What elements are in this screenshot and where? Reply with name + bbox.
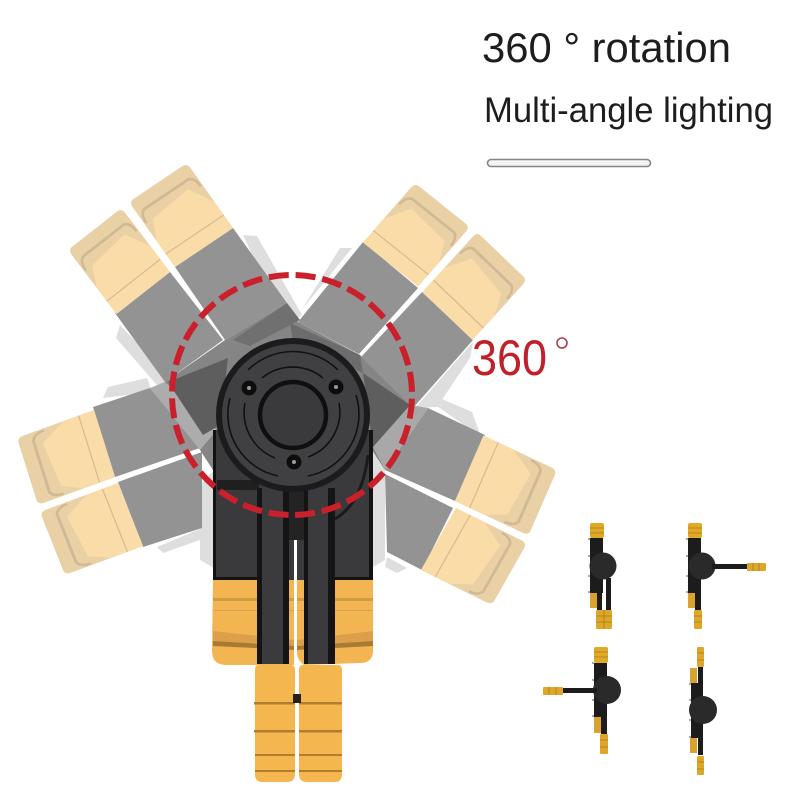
ghost wing tan tip: upper right outer <box>422 232 527 340</box>
ghost wing tan tip: upper right inner <box>363 183 470 286</box>
rotating hub <box>216 338 370 492</box>
red dashed rotation circle <box>172 275 412 515</box>
subtitle: Multi-angle lighting <box>484 91 773 130</box>
hub screws <box>242 380 344 470</box>
title: 360 ° rotation <box>482 24 731 71</box>
small icon: one arm right <box>686 523 766 629</box>
ghost wings: grey panels <box>93 228 485 570</box>
ghost wing tan tip: lower right lower <box>421 508 527 605</box>
small icon: one arm left <box>543 647 621 754</box>
main lamp: right leg <box>304 488 335 664</box>
ghost wing tan tip: lower left lower <box>40 483 143 575</box>
hub groove arcs <box>228 352 359 476</box>
ghost wing tan tip: upper left outer <box>68 208 170 314</box>
ghost wing tan tip: lower right upper <box>455 436 557 536</box>
grey backdrop behind hub <box>165 303 413 520</box>
hub-side shaded wedges <box>150 303 428 470</box>
ghost wing tan tip: upper left inner <box>129 163 233 267</box>
main lamp: centre gap <box>286 488 306 665</box>
ghost shadows behind wings <box>103 235 480 573</box>
main lamp: left leg <box>257 488 289 664</box>
hub centre disk <box>260 382 326 448</box>
decorative bar <box>488 160 650 166</box>
ghost wing tan tip: lower left upper <box>17 410 115 505</box>
red 360 degree label: 360 <box>472 330 547 386</box>
small icon: both arms vertical <box>689 647 717 775</box>
main lamp: gold lower pads <box>254 665 342 782</box>
main lamp: gold panel ends <box>212 580 373 665</box>
small icon: folded position <box>588 523 616 629</box>
main lamp: dark body panel <box>213 430 373 580</box>
